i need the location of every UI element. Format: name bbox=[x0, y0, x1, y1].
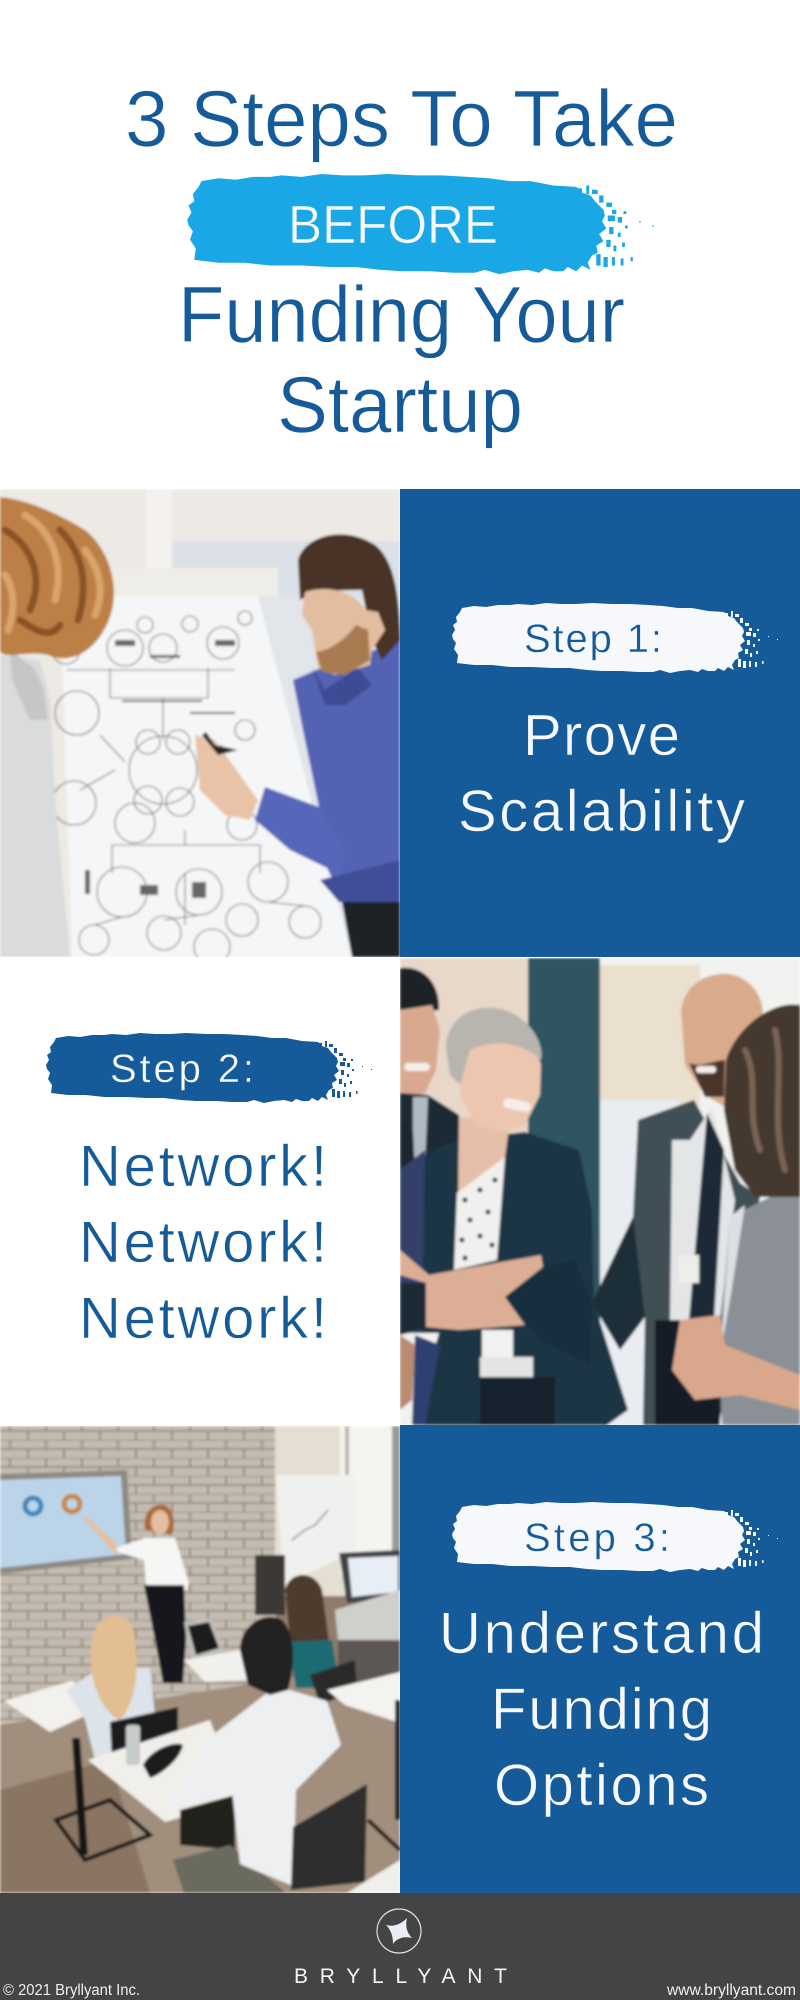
step 3 heading line 3: Options bbox=[494, 1753, 709, 1818]
step 1 heading: Scalability: Scalability bbox=[458, 779, 745, 844]
brand name: BRYLLYANT bbox=[294, 1965, 507, 1988]
panel: step 3 bbox=[400, 1425, 800, 1893]
title line 2: Funding Your bbox=[178, 270, 625, 359]
step 3 heading line 1: Understand bbox=[439, 1601, 764, 1666]
footer bbox=[0, 1893, 800, 2000]
brush stroke: step 3 bbox=[452, 1502, 778, 1572]
photo: two people at flipchart bbox=[0, 489, 400, 965]
step 2 label: Step 2: bbox=[110, 1047, 254, 1091]
brush stroke: step 2 bbox=[46, 1033, 372, 1103]
panel: step 1 bbox=[400, 489, 800, 957]
brush stroke: step 1 bbox=[452, 603, 778, 673]
step 3 heading line 2: Funding bbox=[491, 1677, 712, 1742]
icon: bryllyant logo bbox=[377, 1909, 421, 1953]
before label: BEFORE bbox=[288, 195, 498, 255]
panel: step 2 bbox=[0, 957, 400, 1425]
step 2 heading line 3: Network! bbox=[79, 1286, 327, 1351]
title block bbox=[125, 74, 678, 449]
brush stroke: before bbox=[187, 174, 654, 274]
title line 3: Startup bbox=[277, 360, 523, 449]
copyright: © 2021 Bryllyant Inc. bbox=[3, 1982, 140, 1999]
step 1 heading: Prove: Prove bbox=[523, 703, 680, 768]
step 2 heading line 1: Network! bbox=[79, 1134, 327, 1199]
photo: presentation in brick classroom bbox=[0, 1426, 400, 1893]
title line 1: 3 Steps To Take bbox=[125, 74, 678, 163]
step 3 label: Step 3: bbox=[524, 1516, 670, 1560]
website: www.bryllyant.com bbox=[666, 1982, 796, 1999]
photo: business people networking bbox=[400, 958, 800, 1425]
step 2 heading line 2: Network! bbox=[79, 1210, 327, 1275]
step 1 label: Step 1: bbox=[524, 617, 662, 661]
